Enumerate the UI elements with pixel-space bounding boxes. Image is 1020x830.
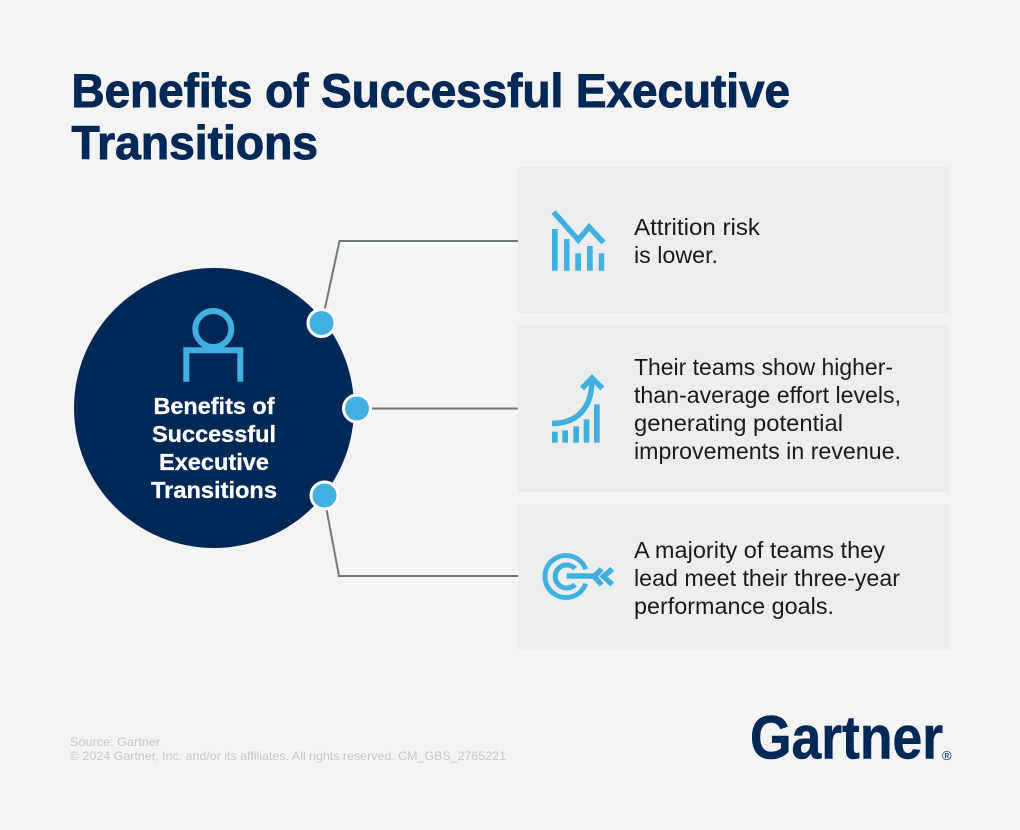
text: effort: than-average effort levels, — [634, 382, 901, 408]
icon: target with arrow — [545, 555, 612, 598]
title: Benefits of Successful Executive — [72, 64, 790, 117]
icon: rising bar chart with arrow — [552, 378, 602, 443]
circle label: Successful — [152, 421, 276, 447]
panel: effort — [518, 325, 950, 492]
title — [72, 64, 790, 169]
text: effort: Their teams show higher- — [634, 354, 893, 380]
text: goals: performance goals. — [634, 593, 834, 619]
text: goals: A majority of teams they — [634, 537, 886, 563]
icon: person — [186, 311, 240, 382]
source note: Source: Gartner — [70, 735, 160, 749]
source note: © 2024 Gartner, Inc. and/or its affiliates. All rights reserved. CM_GBS_2765221 — [70, 749, 506, 763]
circle label: Benefits of — [154, 393, 275, 419]
text: attrition — [634, 214, 761, 268]
panel: attrition — [518, 167, 950, 313]
central circle — [74, 268, 354, 548]
circle label: Executive — [159, 449, 269, 475]
circle label: Transitions — [151, 477, 277, 503]
text: effort: improvements in revenue. — [634, 438, 901, 464]
text: goals — [634, 537, 900, 619]
text: effort — [634, 354, 901, 464]
text: effort: generating potential — [634, 410, 843, 436]
Gartner logo: Gartner — [750, 704, 943, 772]
icon: declining bar chart — [552, 212, 604, 271]
circle label — [151, 393, 277, 503]
connector lines — [324, 241, 518, 576]
text: attrition: is lower. — [634, 242, 718, 268]
connector nodes — [308, 310, 370, 509]
Gartner logo: ® — [942, 748, 952, 763]
text: attrition: Attrition risk — [634, 214, 761, 240]
panel: goals — [518, 504, 950, 650]
title: Transitions — [72, 116, 318, 169]
text: goals: lead meet their three-year — [634, 565, 900, 591]
source note — [70, 735, 506, 763]
